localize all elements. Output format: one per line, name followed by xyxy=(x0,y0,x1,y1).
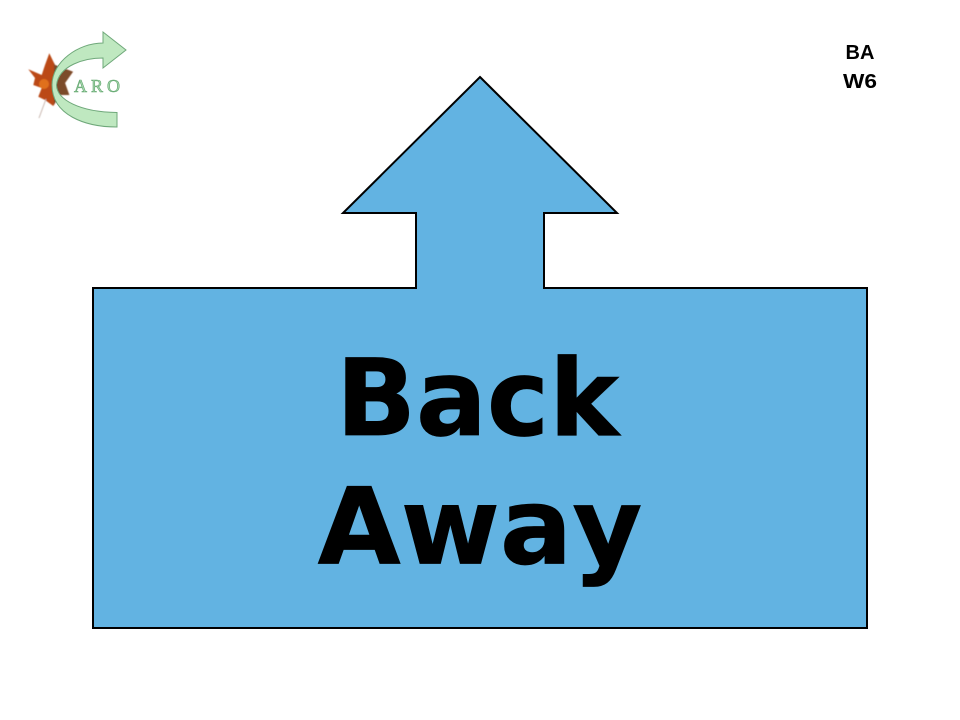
panel: arrow-shaped sign xyxy=(93,77,867,628)
logo: CARO maple leaf and arrow xyxy=(28,32,126,127)
label: BA W6: BA xyxy=(846,42,874,64)
infographic canvas xyxy=(28,31,876,629)
logo text: ARO xyxy=(74,76,120,96)
label: BA W6 xyxy=(843,42,877,93)
heading: Back Away: Away xyxy=(318,466,642,588)
heading: Back Away: Back xyxy=(336,337,621,460)
heading: Back Away xyxy=(318,337,642,588)
icon: maple leaf xyxy=(28,53,73,118)
label: BA W6: W6 xyxy=(843,71,877,93)
icon: curved green arrow xyxy=(52,32,126,127)
